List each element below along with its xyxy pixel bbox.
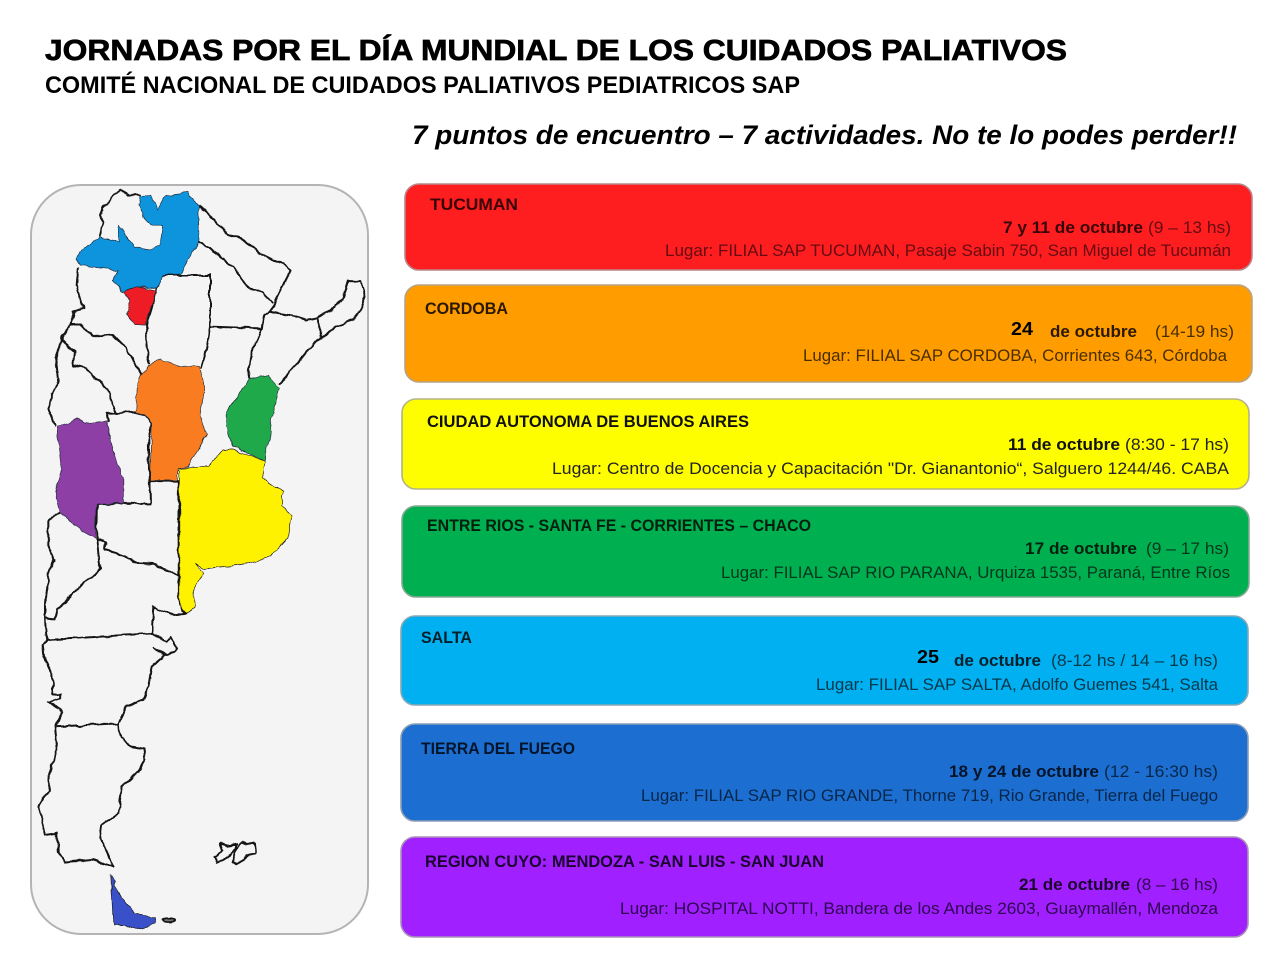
- subtitle: COMITÉ NACIONAL DE CUIDADOS PALIATIVOS PEDIATRICOS SAP: [45, 71, 800, 99]
- region: Córdoba: [136, 359, 207, 480]
- region: Buenos Aires: [179, 450, 292, 613]
- date: 21 de octubre: [1019, 876, 1130, 894]
- tagline: 7 puntos de encuentro – 7 actividades. No te lo podes perder!!: [412, 120, 1237, 150]
- venue: Lugar: HOSPITAL NOTTI, Bandera de los Andes 2603, Guaymallén, Mendoza: [620, 900, 1219, 918]
- date: 11 de octubre: [1008, 436, 1120, 454]
- date: 17 de octubre: [1025, 540, 1137, 558]
- panel: Córdoba: [405, 285, 1252, 382]
- venue: Lugar: FILIAL SAP RIO GRANDE, Thorne 719, Rio Grande, Tierra del Fuego: [641, 787, 1218, 805]
- date: 7 y 11 de octubre: [1003, 219, 1143, 237]
- region: Entre Ríos: [227, 376, 279, 462]
- panel: Región Cuyo: [401, 837, 1248, 937]
- date: 18 y 24 de octubre: [949, 763, 1099, 781]
- hours: (8 – 16 hs): [1136, 876, 1218, 894]
- hours: (14-19 hs): [1155, 323, 1234, 341]
- venue: Lugar: Centro de Docencia y Capacitación "Dr. Gianantonio“, Salguero 1244/46. CABA: [552, 460, 1229, 478]
- region: Salta: [75, 192, 199, 292]
- venue: Lugar: FILIAL SAP CORDOBA, Corrientes 643, Córdoba: [803, 347, 1228, 365]
- venue: Lugar: FILIAL SAP TUCUMAN, Pasaje Sabin 750, San Miguel de Tucumán: [665, 242, 1231, 260]
- hours: (9 – 13 hs): [1148, 219, 1231, 237]
- panel: Tucumán: [405, 184, 1252, 270]
- panel: Tierra del Fuego: [401, 724, 1248, 821]
- date: de octubre: [954, 652, 1041, 670]
- date number: 25: [917, 647, 939, 667]
- region name: CORDOBA: [425, 299, 508, 318]
- panel: Entre Ríos, Santa Fe, Corrientes, Chaco: [402, 506, 1249, 597]
- region name: SALTA: [421, 628, 472, 647]
- region: Tierra del Fuego: [111, 874, 157, 928]
- venue: Lugar: FILIAL SAP RIO PARANA, Urquiza 1535, Paraná, Entre Ríos: [721, 564, 1230, 582]
- island: Isla de los Estados: [163, 919, 175, 922]
- date number: 24: [1011, 319, 1033, 339]
- islands: Malvinas: [214, 842, 256, 865]
- venue: Lugar: FILIAL SAP SALTA, Adolfo Guemes 541, Salta: [816, 676, 1219, 694]
- hours: (9 – 17 hs): [1146, 540, 1229, 558]
- hours: (12 - 16:30 hs): [1104, 763, 1218, 781]
- region name: CIUDAD AUTONOMA DE BUENOS AIRES: [427, 412, 749, 431]
- region: Tucumán: [124, 287, 157, 326]
- region name: ENTRE RIOS - SANTA FE - CORRIENTES – CHACO: [427, 516, 811, 535]
- region: Mendoza: [55, 418, 123, 538]
- hours: (8:30 - 17 hs): [1125, 436, 1229, 454]
- panel: Ciudad Autónoma de Buenos Aires: [402, 399, 1249, 489]
- region name: REGION CUYO: MENDOZA - SAN LUIS - SAN JUAN: [425, 852, 824, 871]
- date: de octubre: [1050, 323, 1137, 341]
- panel: map of Argentina: [31, 185, 368, 934]
- panel: Salta: [401, 616, 1248, 705]
- hours: (8-12 hs / 14 – 16 hs): [1051, 652, 1218, 670]
- map: province outlines: [38, 189, 365, 866]
- region name: TIERRA DEL FUEGO: [421, 739, 575, 758]
- title: JORNADAS POR EL DÍA MUNDIAL DE LOS CUIDADOS PALIATIVOS: [45, 33, 1067, 67]
- region name: TUCUMAN: [430, 195, 518, 214]
